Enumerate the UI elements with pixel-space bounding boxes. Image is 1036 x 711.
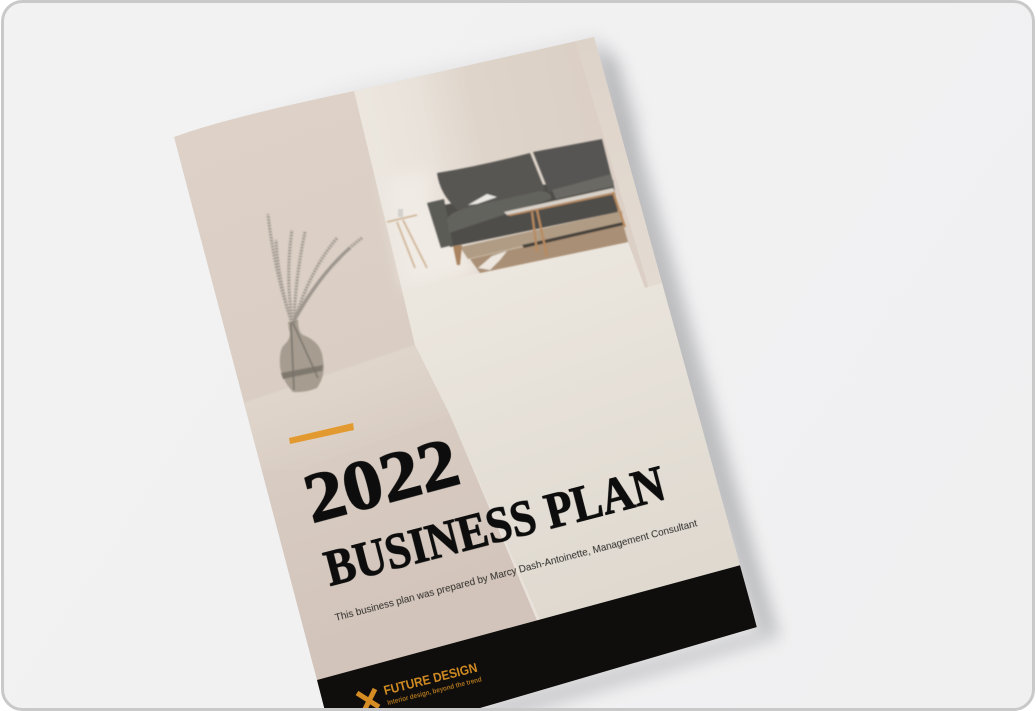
photo: vase with dried plants xyxy=(268,214,362,392)
brochure mockup xyxy=(160,30,780,711)
magazine on sofa xyxy=(468,194,497,205)
panel: beige wall on left xyxy=(174,91,541,690)
floor under sofa xyxy=(460,211,623,259)
panel: floor on left xyxy=(240,345,450,470)
slippers on rug xyxy=(478,251,507,270)
cover base xyxy=(174,76,757,627)
sofa back left cushion xyxy=(437,153,545,210)
sofa seat left xyxy=(447,191,551,233)
photo: sofa scene xyxy=(387,139,628,273)
brochure cover xyxy=(160,30,770,711)
logo tagline: Interior design, beyond the trend xyxy=(387,676,483,707)
heading: 2022: 2022 xyxy=(296,424,467,538)
band: black footer xyxy=(317,565,757,711)
icon: crossed tools xyxy=(357,689,379,709)
vase water line xyxy=(281,365,323,379)
stems in vase xyxy=(291,323,318,390)
drop shadow of brochure xyxy=(349,36,784,708)
sofa lower body xyxy=(444,180,618,247)
panel: light floor right xyxy=(402,242,742,622)
rug xyxy=(470,224,628,273)
coffee table top xyxy=(504,188,615,215)
accent bar xyxy=(289,423,354,444)
text: prepared by line: This business plan was prepared by Marcy Dash-Antoinette, Management Consultant xyxy=(334,517,699,624)
vase body xyxy=(280,320,324,392)
heading: business plan: BUSINESS PLAN xyxy=(319,456,671,598)
dried plant fronds xyxy=(268,214,362,323)
cup on side table xyxy=(398,209,403,217)
panel: light area beside sofa xyxy=(396,186,468,276)
sofa back right cushion xyxy=(533,139,611,192)
sofa left arm xyxy=(427,199,453,248)
panel: spine strip xyxy=(582,38,662,287)
logo name: FUTURE DESIGN xyxy=(382,660,479,698)
panel: upper right wall xyxy=(441,42,648,288)
side table xyxy=(387,215,427,268)
sofa seat right xyxy=(552,174,614,199)
dark rug edge xyxy=(522,222,624,248)
logo: Future Design xyxy=(357,660,483,709)
sofa leg xyxy=(453,245,462,265)
coffee table legs xyxy=(532,192,625,256)
